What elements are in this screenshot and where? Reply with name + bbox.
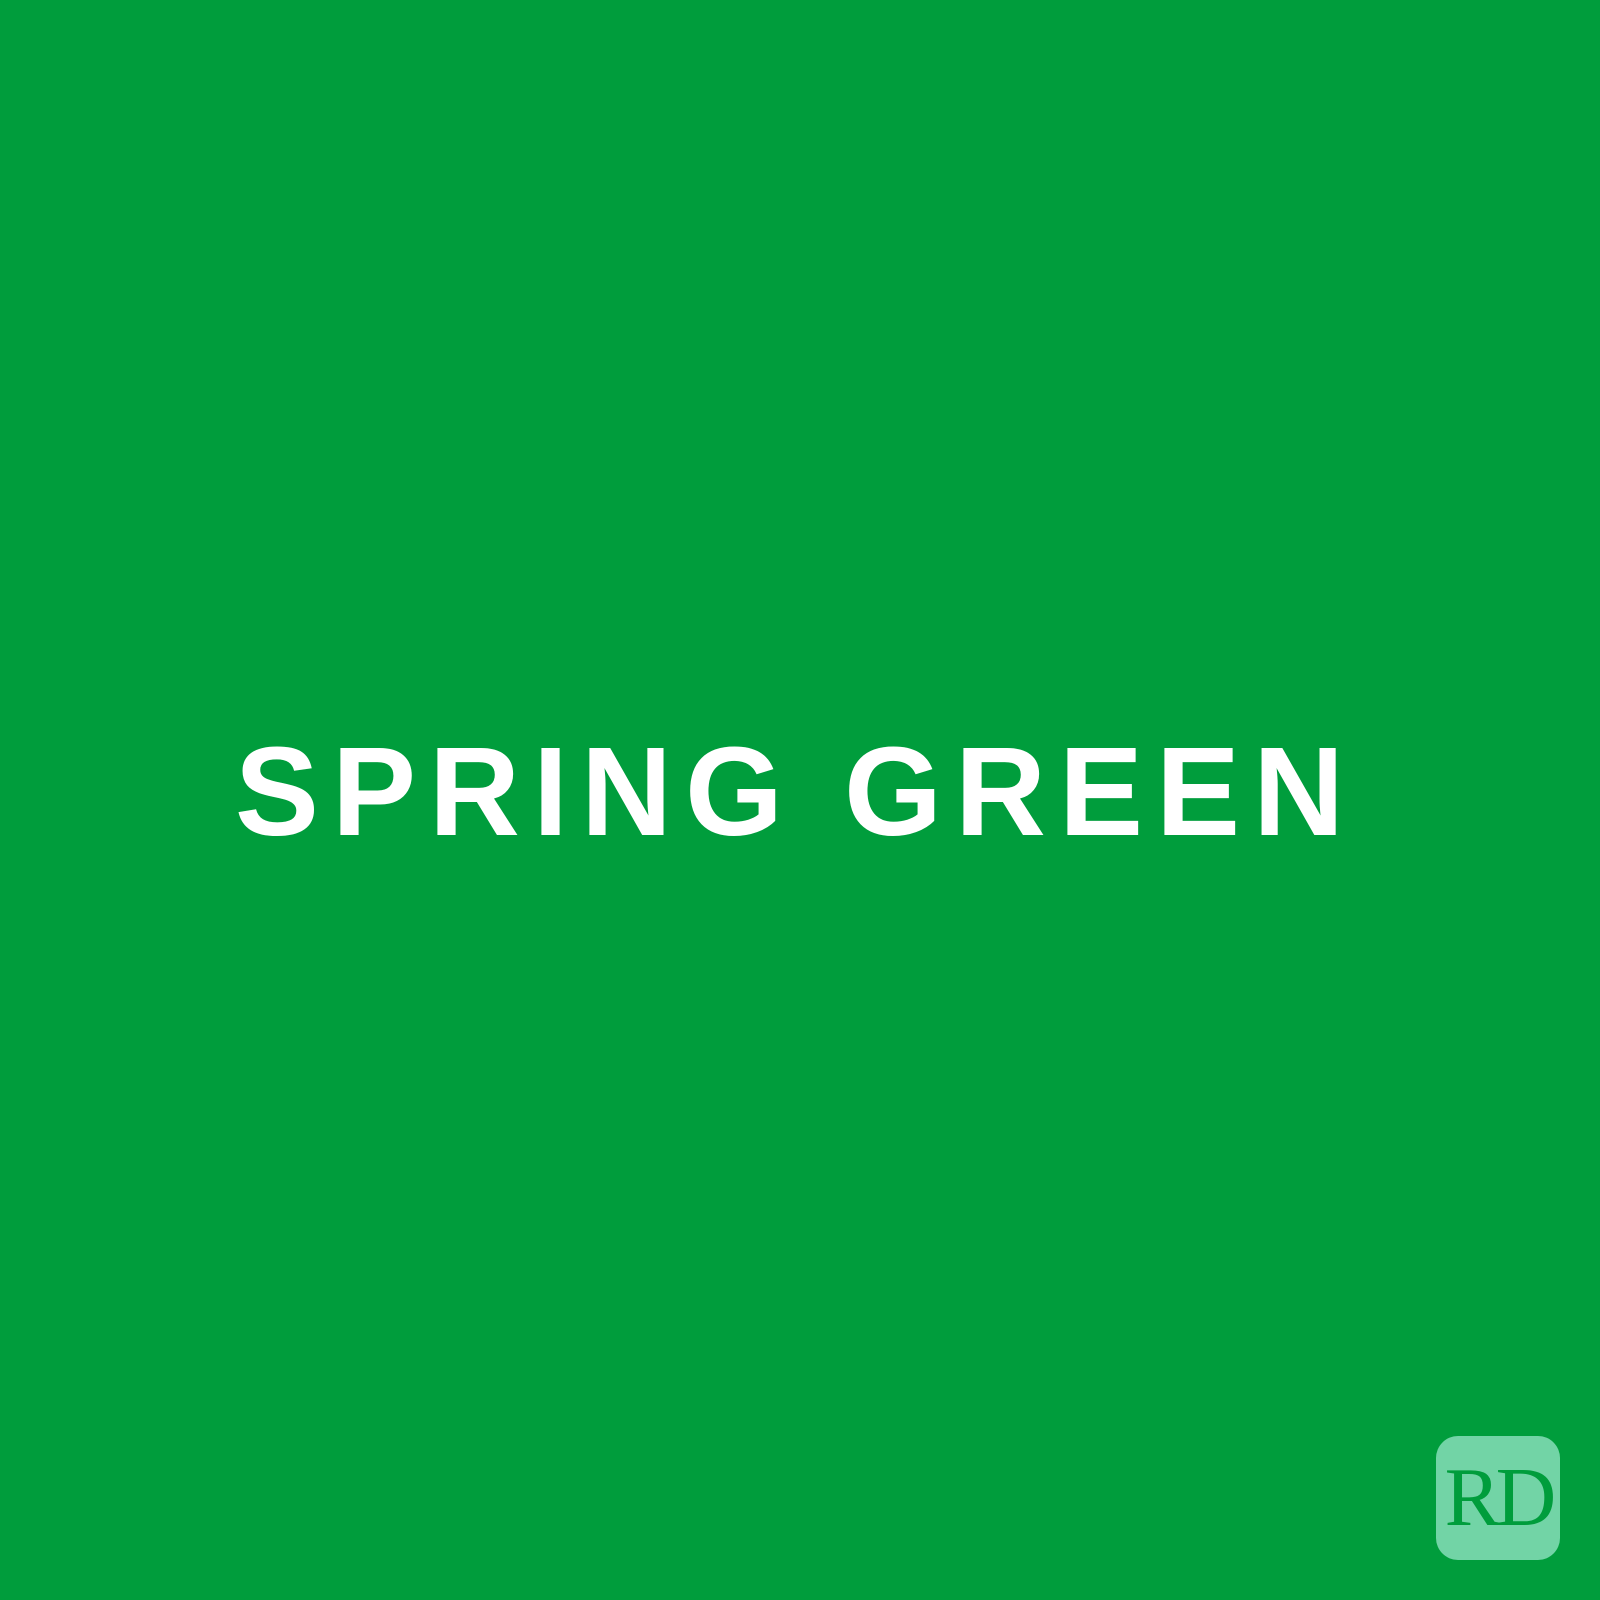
logo: RD [1436, 1436, 1560, 1560]
logo: RD: RD [1445, 1451, 1551, 1544]
title: SPRING GREEN [235, 721, 1357, 862]
